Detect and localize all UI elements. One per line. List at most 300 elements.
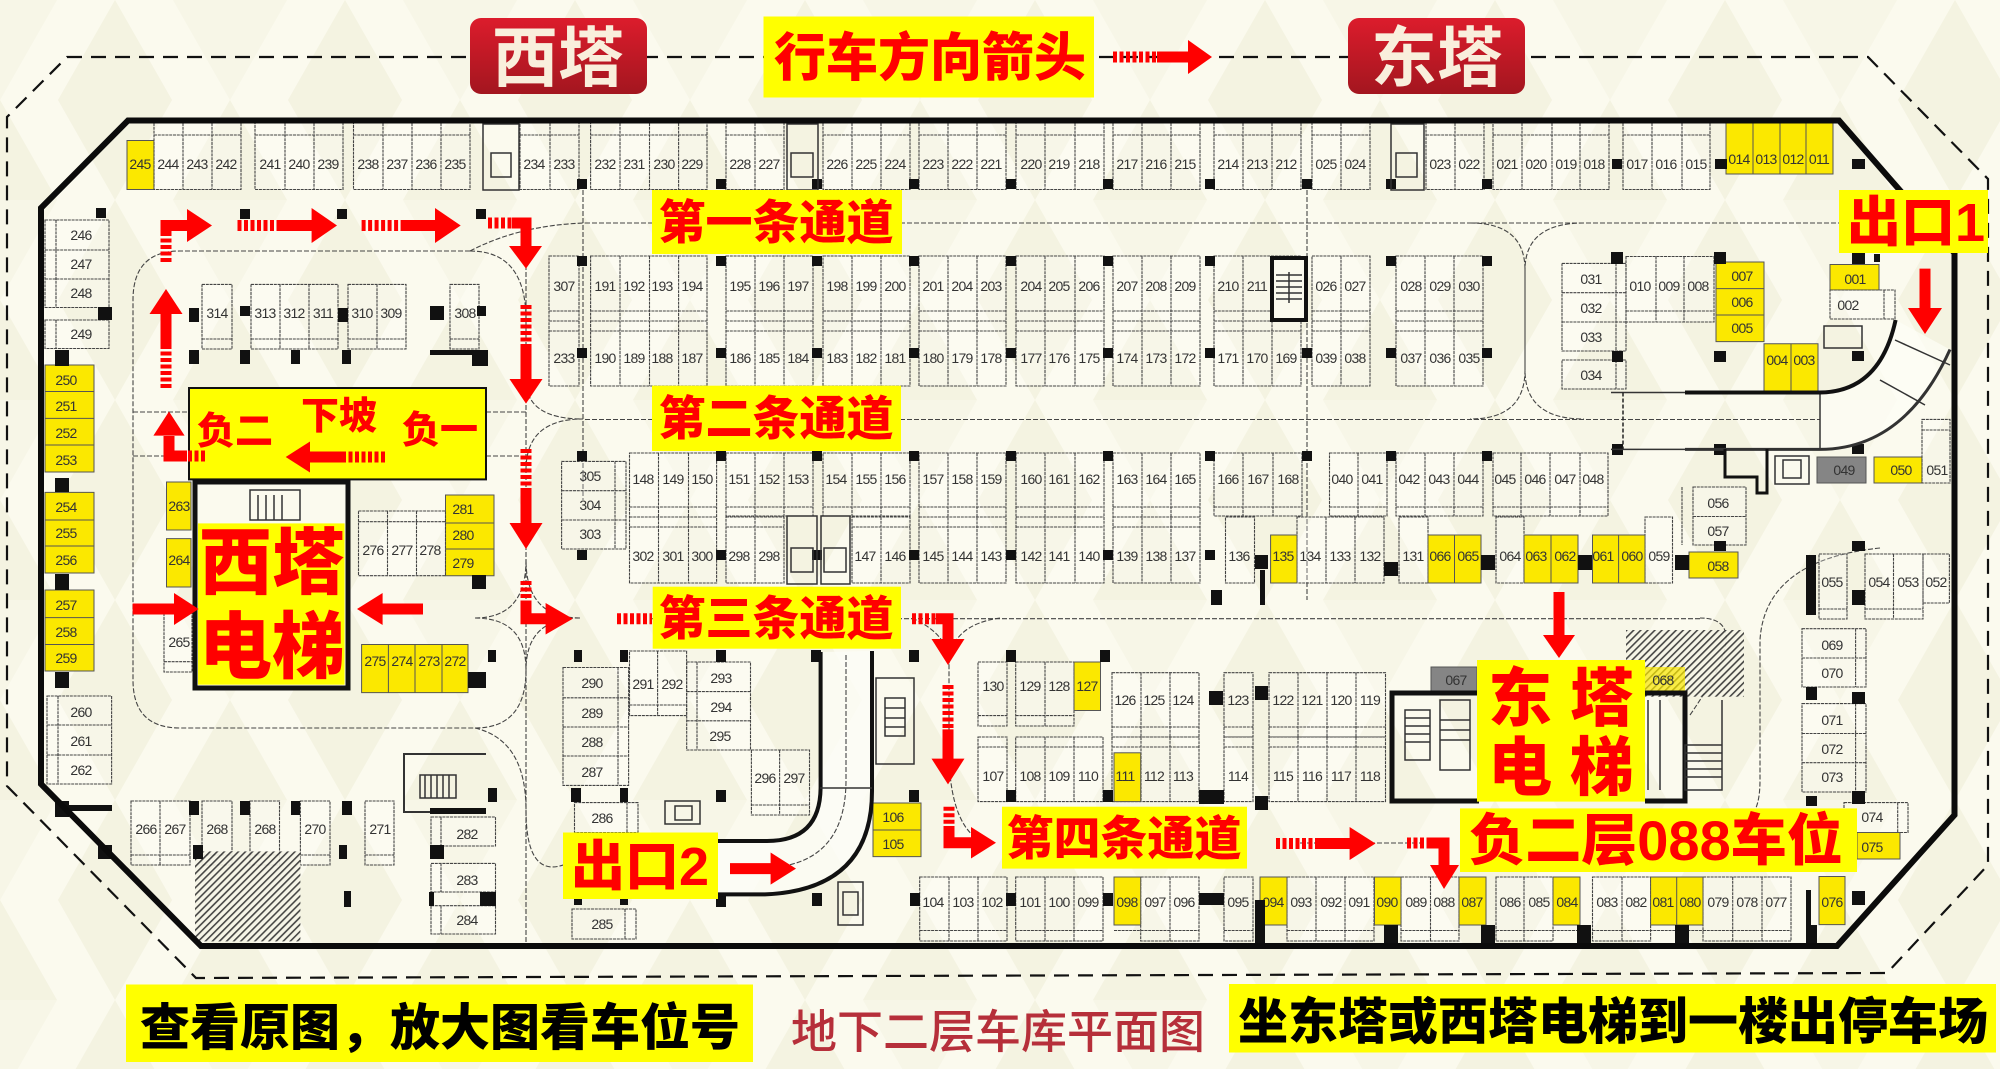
parking rows: 191-190 block: 208 — [1145, 278, 1168, 294]
arrow: turn to aisle 3 — [526, 581, 573, 634]
parking rows: 191-190 block: 197 — [787, 278, 810, 294]
parking rows: 148-137 block: 164 — [1145, 471, 1168, 487]
parking rows: 148-137 block: 136 — [1228, 548, 1251, 564]
parking rows: 191-190 block: 172 — [1174, 350, 1197, 366]
parking rows: 148-137 block: 167 — [1247, 471, 1270, 487]
parking row: top: 025 — [1315, 156, 1338, 172]
parking cells: east side 052-075: 055 — [1821, 574, 1844, 590]
parking cells: centre south 107-130: 107 — [982, 768, 1005, 784]
parking cells: southwest 266-297: 286 — [591, 810, 614, 826]
tower button: east: 东塔 — [1371, 21, 1503, 95]
parking cells: east block 031-010: 001 — [1844, 271, 1867, 287]
label: east elevator: 电 梯 — [1488, 732, 1634, 804]
parking cells: west wall 246-262: 252 — [55, 425, 78, 441]
parking rows: 191-190 block: 180 — [922, 350, 945, 366]
parking cells: southwest 266-297: 285 — [591, 916, 614, 932]
parking rows: 148-137 block: 142 — [1020, 548, 1043, 564]
arrow: aisle top B — [362, 208, 461, 243]
parking row: top: 230 — [653, 156, 676, 172]
parking rows: 191-190 block: 186 — [729, 350, 752, 366]
parking cells: west core 263-314: 311 — [313, 305, 334, 321]
parking cells: west wall 246-262: 262 — [70, 762, 93, 778]
parking cells: east side 052-075: 054 — [1868, 574, 1891, 590]
parking rows: 148-137 block: 302 — [632, 548, 655, 564]
parking rows: 148-137 block: 141 — [1048, 548, 1071, 564]
parking row: top: 231 — [623, 156, 646, 172]
parking cells: west core 263-314: 303 — [579, 526, 602, 542]
parking cells: southwest 266-297: 284 — [456, 912, 479, 928]
parking row: top: 016 — [1655, 156, 1678, 172]
parking cells: east block 031-010: 005 — [1731, 320, 1754, 336]
parking cells: centre south 107-130: 123 — [1227, 692, 1250, 708]
parking rows: 191-190 block: 182 — [855, 350, 878, 366]
arrow: aisle top A — [238, 208, 337, 243]
parking rows: 191-190 block: 198 — [826, 278, 849, 294]
arrow: exit 2 — [730, 852, 796, 885]
label: aisle 2: 第二条通道 — [658, 392, 894, 445]
parking cells: centre south 107-130: 113 — [1173, 768, 1194, 784]
parking cells: west core 263-314: 276 — [362, 542, 385, 558]
parking rows: 191-190 block: 209 — [1174, 278, 1197, 294]
parking rows: 148-137 block: 151 — [728, 471, 751, 487]
parking cells: east side 052-075: 075 — [1861, 839, 1884, 855]
parking cells: east side 052-075: 069 — [1821, 637, 1844, 653]
parking row: bottom: 097 — [1144, 894, 1167, 910]
parking cells: centre south 107-130: 121 — [1301, 692, 1324, 708]
parking row: top: 011 — [1809, 151, 1830, 167]
parking cells: west core 263-314: 279 — [452, 555, 475, 571]
parking row: top: 226 — [826, 156, 849, 172]
parking cells: centre south 107-130: 110 — [1078, 768, 1099, 784]
label: aisle 4: 第四条通道 — [1006, 812, 1242, 865]
parking row: top: 225 — [855, 156, 878, 172]
parking rows: 148-137 block: 066 — [1429, 548, 1452, 564]
parking row: top: 017 — [1626, 156, 1649, 172]
parking rows: 148-137 block: 045 — [1494, 471, 1517, 487]
parking row: top: 224 — [884, 156, 907, 172]
parking rows: 148-137 block: 040 — [1331, 471, 1354, 487]
parking rows: 191-190 block: 178 — [980, 350, 1003, 366]
parking rows: 148-137 block: 131 — [1402, 548, 1425, 564]
parking row: top: 244 — [157, 156, 180, 172]
parking cells: east side 052-075: 067 — [1445, 672, 1468, 688]
parking cells: southwest 266-297: 266 — [135, 821, 158, 837]
parking cells: southwest 266-297: 291 — [632, 676, 655, 692]
building wall — [41, 120, 1954, 946]
parking row: bottom: 101 — [1019, 894, 1042, 910]
parking cells: east block 031-010: 002 — [1837, 297, 1860, 313]
parking cells: southwest 266-297: 289 — [581, 705, 604, 721]
parking cells: east side 052-075: 053 — [1897, 574, 1920, 590]
parking cells: east side 052-075: 070 — [1821, 665, 1844, 681]
parking rows: 191-190 block — [549, 256, 1483, 386]
label: exit 1: 出口1 — [1847, 193, 1985, 253]
parking row: top: 243 — [186, 156, 209, 172]
parking rows: 191-190 block: 200 — [884, 278, 907, 294]
parking row: bottom: 091 — [1348, 894, 1371, 910]
parking row: top: 232 — [594, 156, 617, 172]
parking rows: 191-190 block: 026 — [1315, 278, 1338, 294]
parking rows: 148-137 block: 148 — [632, 471, 655, 487]
parking cells: east block 031-010: 006 — [1731, 294, 1754, 310]
legend arrow — [1113, 40, 1212, 74]
parking row: top: 014 — [1728, 151, 1751, 167]
parking row: top: 218 — [1078, 156, 1101, 172]
parking rows: 191-190 block: 199 — [855, 278, 878, 294]
parking cells: west wall 246-262: 255 — [55, 525, 78, 541]
note: zoom hint: 查看原图，放大图看车位号 — [140, 1000, 740, 1056]
parking cells: west core 263-314: 274 — [391, 653, 414, 669]
parking cells: centre south 107-130: 124 — [1172, 692, 1195, 708]
arrow: to west elevator from left — [133, 593, 199, 625]
exit ramp 2 — [718, 651, 872, 894]
parking cells: west core 263-314: 310 — [351, 305, 374, 321]
parking cells: southwest 266-297: 297 — [783, 770, 806, 786]
parking cells: west wall 246-262: 247 — [70, 256, 93, 272]
elevators — [483, 124, 1862, 925]
parking rows: 148-137 block: 165 — [1174, 471, 1197, 487]
stairwell: southwest — [404, 754, 486, 812]
parking rows: 148-137 block: 163 — [1116, 471, 1139, 487]
parking rows: 148-137 block: 301 — [662, 548, 685, 564]
parking rows: 191-190 block: 176 — [1048, 350, 1071, 366]
note: exit via elevator: 坐东塔或西塔电梯到一楼出停车场 — [1238, 994, 1988, 1050]
label: ramp box: 负二 — [197, 411, 273, 453]
parking rows: 148-137 block: 149 — [662, 471, 685, 487]
parking row: top: 237 — [386, 156, 409, 172]
parking rows: 191-190 block: 203 — [980, 278, 1003, 294]
parking row: top: 245 — [129, 156, 152, 172]
parking row: bottom: 078 — [1736, 894, 1759, 910]
parking cells: centre south 107-130: 126 — [1114, 692, 1137, 708]
parking row: bottom: 079 — [1707, 894, 1730, 910]
parking row: bottom: 076 — [1821, 894, 1844, 910]
parking row: top: 236 — [415, 156, 438, 172]
parking rows: 148-137 block: 155 — [855, 471, 878, 487]
parking row: bottom: 081 — [1652, 894, 1675, 910]
parking rows: 191-190 block: 030 — [1458, 278, 1481, 294]
parking cells: east block 031-010 — [1562, 256, 1950, 545]
parking rows: 148-137 block: 146 — [884, 548, 907, 564]
parking cells: east block 031-010: 051 — [1926, 462, 1949, 478]
legend: driving direction — [764, 16, 1094, 98]
parking rows: 191-190 block: 027 — [1344, 278, 1367, 294]
arrow: aisle 4 east — [1276, 827, 1376, 860]
parking cells: east block 031-010: 049 — [1833, 462, 1856, 478]
parking cells: southwest 266-297: 283 — [456, 872, 479, 888]
parking cells: west core 263-314: 304 — [579, 497, 602, 513]
parking row: top: 212 — [1275, 156, 1298, 172]
parking cells: west wall 246-262: 261 — [70, 733, 93, 749]
parking cells: centre south 107-130: 125 — [1143, 692, 1166, 708]
parking cells: east side 052-075 — [1431, 554, 1949, 859]
parking row: bottom: 096 — [1173, 894, 1196, 910]
parking cells: centre south 107-130: 112 — [1144, 768, 1165, 784]
parking row: bottom: 077 — [1765, 894, 1788, 910]
parking cells: east block 031-010: 004 — [1766, 352, 1789, 368]
parking cells: centre south 107-130: 118 — [1360, 768, 1381, 784]
parking row: top: 217 — [1116, 156, 1139, 172]
parking rows: 191-190 block: 204 — [951, 278, 974, 294]
parking rows: 148-137 block: 143 — [980, 548, 1003, 564]
parking cells: southwest 266-297: 267 — [164, 821, 187, 837]
parking cells: east block 031-010: 008 — [1687, 278, 1710, 294]
parking rows: 191-190 block: 038 — [1344, 350, 1367, 366]
parking cells: centre south 107-130: 108 — [1019, 768, 1042, 784]
note: zoom hint — [126, 984, 753, 1062]
parking cells: east block 031-010: 033 — [1580, 329, 1603, 345]
arrow: top-right turn — [488, 223, 542, 269]
parking rows: 148-137 block: 168 — [1277, 471, 1300, 487]
parking row: bottom: 094 — [1262, 894, 1285, 910]
parking cells: centre south 107-130: 105 — [882, 836, 905, 852]
parking row: bottom: 103 — [952, 894, 975, 910]
parking rows: 148-137 block: 062 — [1554, 548, 1577, 564]
parking rows: 191-190 block: 196 — [758, 278, 781, 294]
parking rows: 148-137 block: 060 — [1621, 548, 1644, 564]
parking rows: 148-137 block: 140 — [1078, 548, 1101, 564]
structural columns and walls: west and south — [55, 306, 1865, 945]
parking rows: 148-137 block: 048 — [1582, 471, 1605, 487]
parking rows: 191-190 block: 175 — [1078, 350, 1101, 366]
parking rows: 148-137 block: 139 — [1116, 548, 1139, 564]
parking cells: centre south 107-130 — [873, 662, 1386, 857]
parking rows: 191-190 block: 210 — [1217, 278, 1240, 294]
arrow: aisle 3 turn down — [912, 619, 964, 665]
parking row: bottom — [920, 876, 1845, 941]
parking row: top: 238 — [357, 156, 380, 172]
parking rows: 191-190 block: 171 — [1217, 350, 1240, 366]
parking row: top: 020 — [1525, 156, 1548, 172]
parking rows: 148-137 block: 132 — [1359, 548, 1382, 564]
parking rows: 148-137 block: 160 — [1020, 471, 1043, 487]
parking row: top: 240 — [288, 156, 311, 172]
parking cells: west core 263-314: 277 — [391, 542, 414, 558]
parking cells: east side 052-075: 073 — [1821, 769, 1844, 785]
parking rows: 148-137 block: 150 — [691, 471, 714, 487]
parking rows: 148-137 block: 156 — [884, 471, 907, 487]
parking rows: 148-137 block: 137 — [1174, 548, 1197, 564]
parking row: bottom: 104 — [922, 894, 945, 910]
parking rows: 148-137 block: 300 — [691, 548, 714, 564]
parking cells: west core 263-314: 308 — [454, 305, 477, 321]
parking cells: centre south 107-130: 117 — [1331, 768, 1352, 784]
parking cells: centre south 107-130: 106 — [882, 809, 905, 825]
parking cells: east block 031-010: 057 — [1707, 523, 1730, 539]
parking cells: east block 031-010: 003 — [1793, 352, 1816, 368]
parking cells: west wall 246-262: 246 — [70, 227, 93, 243]
parking row: top: 213 — [1246, 156, 1269, 172]
parking row: top — [127, 123, 1833, 190]
parking rows: 148-137 block: 043 — [1428, 471, 1451, 487]
parking cells: southwest 266-297: 282 — [456, 826, 479, 842]
parking rows: 148-137 block: 133 — [1329, 548, 1352, 564]
parking rows: 191-190 block: 037 — [1400, 350, 1423, 366]
parking rows: 148-137 block: 145 — [922, 548, 945, 564]
tower button: west: 西塔 — [492, 21, 624, 95]
parking rows: 191-190 block: 192 — [623, 278, 646, 294]
parking rows: 148-137 block: 158 — [951, 471, 974, 487]
parking cells: west core 263-314: 275 — [364, 653, 387, 669]
parking cells: west wall 246-262: 248 — [70, 285, 93, 301]
parking cells: southwest 266-297: 271 — [369, 821, 392, 837]
parking rows: 148-137 block: 135 — [1272, 548, 1295, 564]
label: west elevator — [198, 523, 345, 688]
parking rows: 148-137 block: 152 — [758, 471, 781, 487]
parking rows: 191-190 block: 188 — [651, 350, 674, 366]
parking rows: 191-190 block: 185 — [758, 350, 781, 366]
parking cells: centre south 107-130: 127 — [1076, 678, 1099, 694]
parking cells: east block 031-010: 007 — [1731, 268, 1754, 284]
parking cells: west core 263-314: 273 — [418, 653, 441, 669]
parking row: top: 229 — [681, 156, 704, 172]
parking row: top: 233 — [553, 156, 576, 172]
parking cells: southwest 266-297: 296 — [754, 770, 777, 786]
parking row: bottom: 098 — [1116, 894, 1139, 910]
parking cells: southwest 266-297: 293 — [710, 670, 733, 686]
stairwell: centre — [1272, 258, 1306, 320]
arrow: exit 1 — [1908, 269, 1942, 334]
parking cells: southwest 266-297: 270 — [304, 821, 327, 837]
parking cells: west core 263-314: 281 — [452, 501, 475, 517]
parking rows: 148-137 block: 154 — [825, 471, 848, 487]
parking row: top: 018 — [1583, 156, 1606, 172]
parking row: top: 215 — [1174, 156, 1197, 172]
parking row: top: 214 — [1217, 156, 1240, 172]
parking cells: west wall 246-262: 253 — [55, 452, 78, 468]
parking cells: southwest 266-297: 268 — [206, 821, 229, 837]
label: aisle 3: 第三条通道 — [658, 592, 894, 645]
parking cells: west core 263-314: 309 — [380, 305, 403, 321]
parking rows: 191-190 block: 195 — [729, 278, 752, 294]
parking cells: west core 263-314: 314 — [206, 305, 229, 321]
parking row: bottom: 088 — [1433, 894, 1456, 910]
parking cells: west wall 246-262: 258 — [55, 624, 78, 640]
parking row: bottom: 084 — [1556, 894, 1579, 910]
parking rows: 148-137 block: 064 — [1499, 548, 1522, 564]
parking row: top: 021 — [1496, 156, 1519, 172]
parking rows: 191-190 block: 173 — [1145, 350, 1168, 366]
parking cells: west core 263-314: 263 — [168, 498, 191, 514]
parking rows: 148-137 block: 134 — [1299, 548, 1322, 564]
parking cells: southwest 266-297 — [131, 651, 810, 941]
arrow: to east elevator — [1543, 592, 1575, 658]
parking cells: centre south 107-130: 130 — [982, 678, 1005, 694]
parking cells: centre south 107-130: 119 — [1360, 692, 1381, 708]
parking row: bottom: 102 — [981, 894, 1004, 910]
parking rows: 191-190 block: 177 — [1020, 350, 1043, 366]
label: ramp box — [189, 388, 486, 479]
parking rows: 148-137 block: 298 — [758, 548, 781, 564]
west tower core — [195, 482, 348, 688]
parking rows: 148-137 block: 059 — [1648, 548, 1671, 564]
parking cells: west wall 246-262: 251 — [55, 398, 78, 414]
parking rows: 148-137 block: 166 — [1217, 471, 1240, 487]
parking row: top: 216 — [1145, 156, 1168, 172]
parking rows: 191-190 block: 233 — [553, 350, 576, 366]
parking rows: 148-137 block: 041 — [1361, 471, 1384, 487]
parking cells: west wall 246-262: 259 — [55, 650, 78, 666]
parking row: bottom: 089 — [1405, 894, 1428, 910]
label: aisle 1: 第一条通道 — [658, 196, 894, 249]
parking rows: 148-137 block: 144 — [951, 548, 974, 564]
parking rows: 191-190 block: 183 — [826, 350, 849, 366]
parking rows: 191-190 block: 194 — [681, 278, 704, 294]
parking cells: east side 052-075: 052 — [1925, 574, 1948, 590]
parking cells: east block 031-010: 050 — [1890, 462, 1913, 478]
parking rows: 191-190 block: 201 — [922, 278, 945, 294]
east tower core — [1392, 693, 1722, 801]
parking cells: west wall 246-262: 260 — [70, 704, 93, 720]
parking cells: southwest 266-297: 287 — [581, 764, 604, 780]
parking row: bottom: 099 — [1077, 894, 1100, 910]
parking cells: southwest 266-297: 294 — [710, 699, 733, 715]
parking cells: centre south 107-130: 115 — [1273, 768, 1294, 784]
parking rows: 148-137 block: 138 — [1145, 548, 1168, 564]
floor plan — [41, 120, 1954, 950]
parking cells: west core 263-314: 272 — [444, 653, 467, 669]
parking cells: west wall 246-262: 256 — [55, 552, 78, 568]
parking cells: east block 031-010: 056 — [1707, 495, 1730, 511]
parking cells: west core 263-314: 264 — [168, 552, 191, 568]
parking rows: 191-190 block: 181 — [884, 350, 907, 366]
parking row: top: 241 — [259, 156, 282, 172]
parking cells: centre south 107-130: 122 — [1272, 692, 1295, 708]
parking row: bottom: 085 — [1528, 894, 1551, 910]
parking rows: 191-190 block: 174 — [1116, 350, 1139, 366]
parking rows: 148-137 block: 044 — [1457, 471, 1480, 487]
parking rows: 148-137 block: 157 — [922, 471, 945, 487]
parking cells: southwest 266-297: 295 — [709, 728, 732, 744]
parking row: top: 239 — [317, 156, 340, 172]
parking row: top: 022 — [1458, 156, 1481, 172]
label: west elevator: 电梯 — [199, 607, 345, 688]
parking cells: west core 263-314 — [164, 284, 626, 693]
parking row: top: 228 — [729, 156, 752, 172]
parking rows: 148-137 block: 153 — [787, 471, 810, 487]
parking rows: 191-190 block: 179 — [951, 350, 974, 366]
parking row: bottom: 086 — [1499, 894, 1522, 910]
parking cells: centre south 107-130: 128 — [1048, 678, 1071, 694]
label: ramp box: 负一 — [402, 410, 478, 452]
parking cells: east block 031-010: 034 — [1580, 367, 1603, 383]
parking cells: west core 263-314: 280 — [452, 527, 475, 543]
label: exit 2: 出口2 — [571, 837, 709, 897]
parking rows: 148-137 block: 046 — [1524, 471, 1547, 487]
parking rows: 191-190 block: 206 — [1078, 278, 1101, 294]
parking cells: centre south 107-130: 116 — [1302, 768, 1323, 784]
arrow: up west lane — [150, 289, 182, 388]
parking rows: 191-190 block: 205 — [1048, 278, 1071, 294]
parking cells: southwest 266-297: 290 — [581, 675, 604, 691]
parking cells: west core 263-314: 313 — [254, 305, 277, 321]
parking rows: 148-137 block: 147 — [854, 548, 877, 564]
parking row: top: 219 — [1048, 156, 1071, 172]
arrow: to west elevator from right — [357, 593, 423, 625]
parking rows: 148-137 block: 161 — [1048, 471, 1071, 487]
parking cells: east side 052-075: 072 — [1821, 741, 1844, 757]
parking row: top: 023 — [1429, 156, 1452, 172]
arrow: down to ramp — [510, 305, 542, 404]
parking row: top: 220 — [1020, 156, 1043, 172]
parking cells: southwest 266-297: 288 — [581, 734, 604, 750]
parking rows: 148-137 block: 047 — [1554, 471, 1577, 487]
parking row: top: 012 — [1782, 151, 1805, 167]
arrow: to spot 088 — [1407, 843, 1459, 889]
parking rows: 191-190 block: 190 — [594, 350, 617, 366]
parking row: top: 013 — [1755, 151, 1778, 167]
parking cells: east block 031-010: 010 — [1629, 278, 1652, 294]
